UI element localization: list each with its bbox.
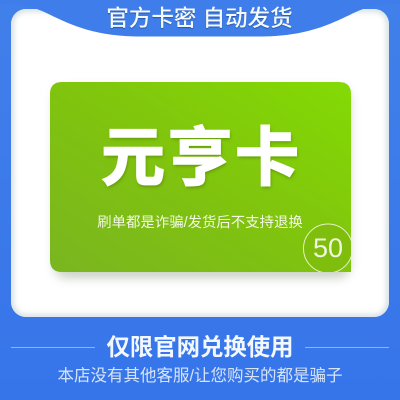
footer left rule	[11, 347, 95, 348]
footer right rule	[305, 347, 389, 348]
card notice: 刷单都是诈骗/发货后不支持退换	[97, 214, 303, 230]
card value: 50	[313, 233, 343, 263]
background and white panel	[11, 9, 389, 317]
footer heading: 仅限官网兑换使用	[106, 334, 294, 360]
card title: 元亨卡	[101, 122, 302, 194]
footer warning: 本店没有其他客服/让您购买的都是骗子	[57, 367, 343, 385]
green card	[50, 82, 352, 278]
header notch	[0, 0, 400, 36]
value badge circle	[304, 224, 352, 273]
header text: 官方卡密 自动发货	[106, 6, 293, 30]
